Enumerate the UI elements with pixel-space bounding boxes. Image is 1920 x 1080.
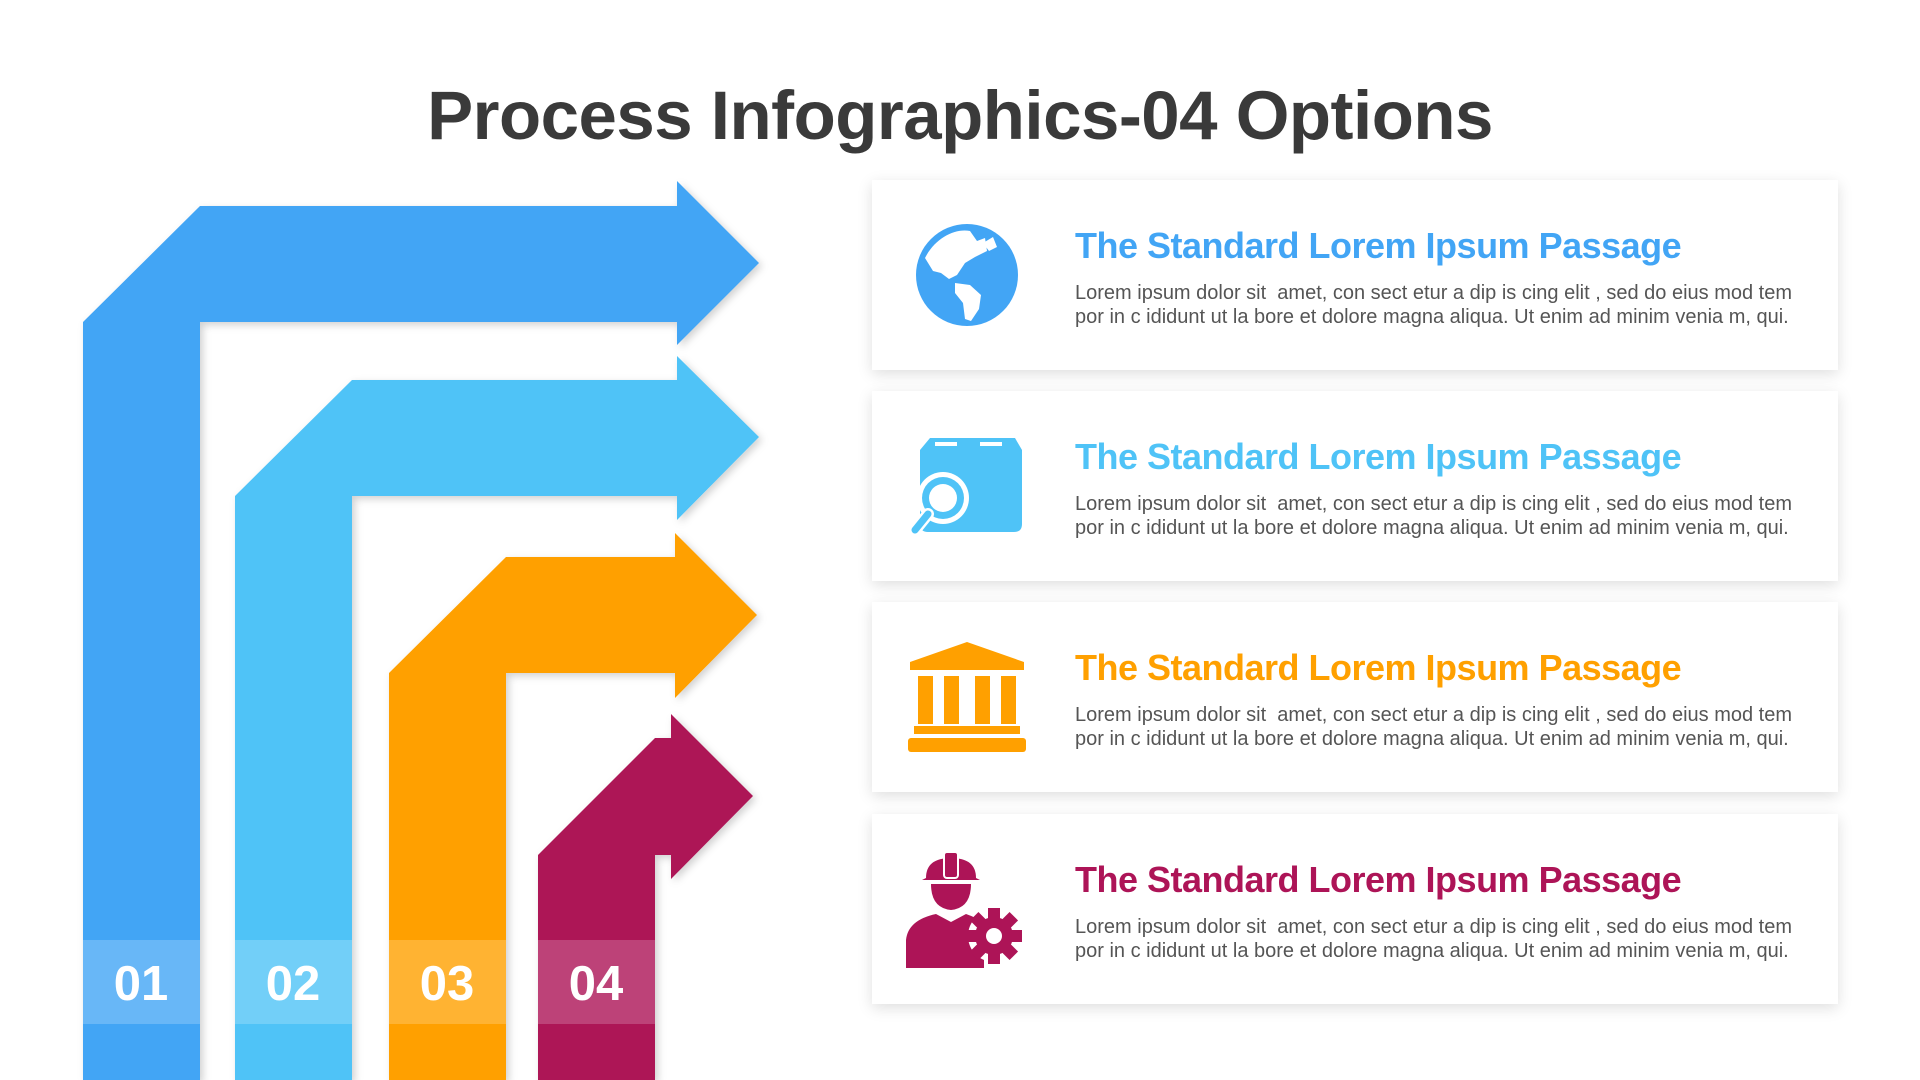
text 1: Lorem ipsum dolor sit amet, con sect etur a dip is cing elit , sed do eius mod tem xyxy=(1075,282,1792,304)
arrow 1 xyxy=(83,181,759,1080)
text 4 xyxy=(1075,916,1792,962)
arrow 3: 03 xyxy=(420,957,474,1011)
heading 2: The Standard Lorem Ipsum Passage xyxy=(1075,436,1681,477)
panel 1 xyxy=(872,180,1838,370)
arrow 4: 04 xyxy=(569,957,623,1011)
heading 4: The Standard Lorem Ipsum Passage xyxy=(1075,859,1681,900)
text 3: Lorem ipsum dolor sit amet, con sect etur a dip is cing elit , sed do eius mod tem xyxy=(1075,704,1792,726)
text 2: Lorem ipsum dolor sit amet, con sect etur a dip is cing elit , sed do eius mod tem xyxy=(1075,493,1792,515)
arrows graphic xyxy=(82,181,763,1080)
text 2: por in c ididunt ut la bore et dolore magna aliqua. Ut enim ad minim venia m, qui. xyxy=(1075,517,1789,539)
text 1 xyxy=(1075,282,1792,328)
text 4: Lorem ipsum dolor sit amet, con sect etur a dip is cing elit , sed do eius mod tem xyxy=(1075,916,1792,938)
panel 3 xyxy=(872,602,1838,792)
panel 4 xyxy=(872,814,1838,1004)
text 3 xyxy=(1075,704,1792,750)
text 4: por in c ididunt ut la bore et dolore magna aliqua. Ut enim ad minim venia m, qui. xyxy=(1075,940,1789,962)
arrow 1: 01 xyxy=(114,957,168,1011)
title: Process Infographics-04 Options xyxy=(427,77,1493,154)
text 3: por in c ididunt ut la bore et dolore magna aliqua. Ut enim ad minim venia m, qui. xyxy=(1075,728,1789,750)
arrow 2: 02 xyxy=(266,957,320,1011)
icon: worker with gear xyxy=(906,853,1022,968)
icon: bank xyxy=(908,642,1026,752)
arrow 4 xyxy=(538,714,753,1080)
heading 3: The Standard Lorem Ipsum Passage xyxy=(1075,647,1681,688)
panel 2 xyxy=(872,391,1838,581)
heading 1: The Standard Lorem Ipsum Passage xyxy=(1075,225,1681,266)
icon: globe xyxy=(916,224,1018,326)
arrow 2 xyxy=(235,356,759,1080)
text 1: por in c ididunt ut la bore et dolore magna aliqua. Ut enim ad minim venia m, qui. xyxy=(1075,306,1789,328)
icon: box with magnifier xyxy=(912,438,1022,534)
text 2 xyxy=(1075,493,1792,539)
arrow 3 xyxy=(389,533,757,1080)
